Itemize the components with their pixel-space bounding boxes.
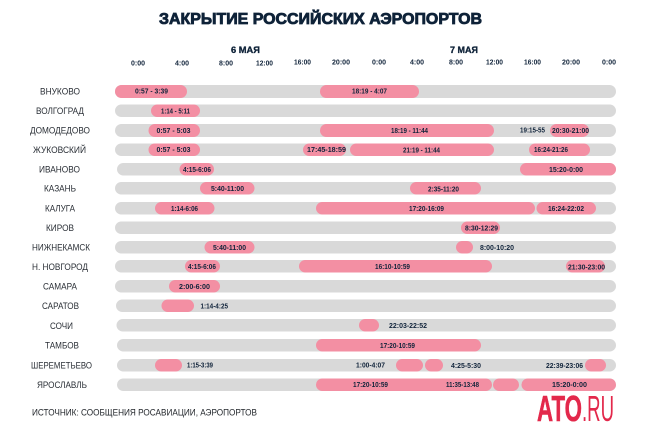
row: Казань [44,182,616,194]
row: Нижнекамск [32,241,616,254]
row: Иваново: ИВАНОВО [39,164,80,176]
row: Жуковский: 16:24-21:26 [534,145,568,154]
row: Ярославль: 17:20-10:59 [353,380,388,389]
time axis: 20:00 [332,58,350,66]
row: Шереметьево: ШЕРЕМЕТЬЕВО [31,360,92,372]
source note: ИСТОЧНИК: СООБЩЕНИЯ РОСАВИАЦИИ, АЭРОПОРТОВ [32,408,257,418]
row: Шереметьево: 1:15-3:39 [187,360,213,370]
row: Ярославль: 11:35-13:48 [446,380,479,389]
time axis: 0:00 [372,58,386,66]
row: Иваново: 15:20-0:00 [549,165,583,174]
row: Жуковский: 21:19 - 11:44 [403,145,441,154]
row: Самара [43,280,616,292]
title: ЗАКРЫТИЕ РОССИЙСКИХ АЭРОПОРТОВ [159,10,482,28]
row: Нижнекамск: НИЖНЕКАМСК [32,242,90,254]
row: Нижнекамск: 5:40-11:00 [213,243,246,252]
row: Внуково: 0:57 - 3:39 [135,86,168,96]
row: Самара: САМАРА [43,282,78,292]
row: Саратов [42,300,616,312]
row: Тамбов [45,339,616,352]
time axis: 16:00 [524,58,541,66]
row: Калуга [45,202,616,214]
row: Калуга: КАЛУГА [45,204,76,214]
row: Самара: 2:00-6:00 [179,282,210,291]
row: Иваново [39,163,616,176]
row: Киров [46,222,616,234]
time axis: 4:00 [175,58,189,68]
time axis: 8:00 [219,58,233,68]
row: Казань: 5:40-11:00 [211,184,244,193]
row: Саратов: 1:14-4:25 [200,302,229,310]
row: Волгоград [36,104,616,117]
date label: 6 May: 6 МАЯ [231,45,260,55]
row: Домодедово: 20:30-21:00 [552,126,589,135]
row: Калуга: 17:20-16:09 [409,204,444,213]
row: Сочи: 22:03-22:52 [389,321,427,330]
time axis: 12:00 [256,58,273,68]
row: Жуковский: ЖУКОВСКИЙ [33,144,86,156]
time axis: 0:00 [131,58,145,68]
row: Внуково [40,85,616,98]
row: Шереметьево: 1:00-4:07 [356,360,385,369]
row: Киров: 8:30-12:29 [465,224,498,232]
row: Жуковский: 17:45-18:59 [307,145,346,154]
row: Домодедово [30,124,616,137]
row: Н. Новгород: 21:30-23:00 [568,262,605,272]
row: Иваново: 4:15-6:06 [183,165,211,174]
time axis: 12:00 [486,58,503,66]
row: Тамбов: 17:20-10:59 [380,341,415,350]
row: Киров: КИРОВ [46,223,74,234]
row: Ярославль [37,378,616,391]
row: Домодедово: 19:15-55 [520,126,546,134]
row: Жуковский: 0:57 - 5:03 [156,145,190,154]
row: Домодедово: 18:19 - 11:44 [391,126,429,135]
row: Домодедово: ДОМОДЕДОВО [30,126,90,136]
logo: ATO.RU: ATO [537,388,582,429]
time axis: 4:00 [410,58,424,66]
row: Нижнекамск: 8:00-10:20 [480,243,514,252]
time axis [131,58,616,68]
row: Сочи: СОЧИ [50,321,73,332]
row: Н. Новгород [32,260,616,273]
row: Домодедово: 0:57 - 5:03 [156,126,190,135]
time axis: 0:00 [602,58,616,66]
row: Жуковский [33,144,616,156]
row: Ярославль: 15:20-0:00 [552,380,587,389]
row: Ярославль: ЯРОСЛАВЛЬ [37,380,87,391]
row: Внуково: 18:19 - 4:07 [352,86,387,96]
row: Волгоград: ВОЛГОГРАД [36,106,84,117]
row: Волгоград: 1:14 - 5:11 [161,106,191,116]
row: Казань: 2:35-11:20 [428,184,459,194]
row: Внуково: ВНУКОВО [40,86,80,98]
row: Шереметьево: 22:39-23:06 [546,361,583,370]
row: Н. Новгород: Н. НОВГОРОД [32,262,88,273]
row: Шереметьево: 4:25-5:30 [451,361,481,370]
date label: 7 May: 7 МАЯ [450,45,478,55]
time axis: 8:00 [449,58,463,66]
row: Калуга: 16:24-22:02 [548,204,584,213]
row: Калуга: 1:14-6:06 [171,204,198,213]
row: Саратов: САРАТОВ [42,301,79,312]
row: Шереметьево [31,359,616,372]
time axis: 16:00 [294,58,311,66]
row: Н. Новгород: 4:15-6:06 [188,262,216,271]
time axis: 20:00 [562,58,580,66]
row: Н. Новгород: 16:10-10:59 [375,262,410,271]
row: Сочи [50,319,616,332]
logo: ATO.RU: .RU [582,388,614,429]
row: Тамбов: ТАМБОВ [45,340,79,352]
row: Казань: КАЗАНЬ [44,184,76,194]
